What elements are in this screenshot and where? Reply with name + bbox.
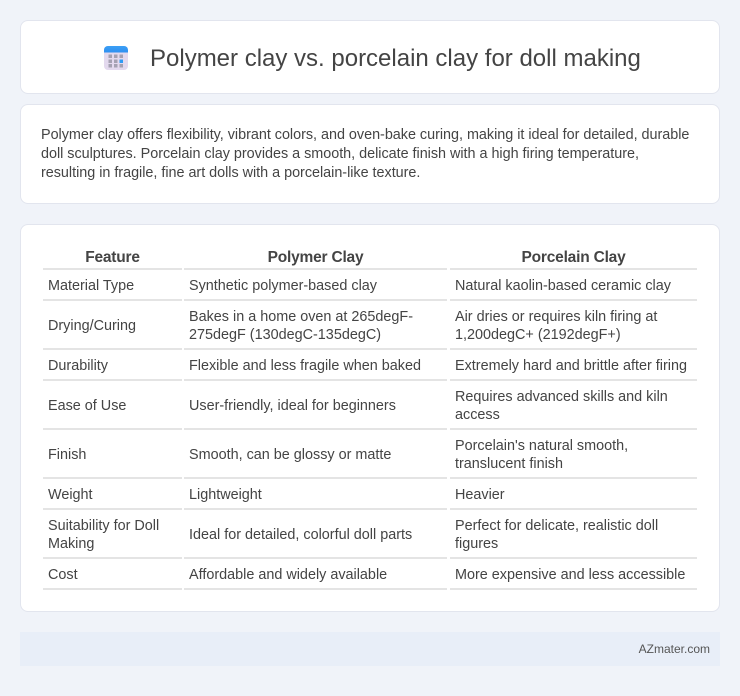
comparison table: Heavier	[455, 487, 505, 503]
comparison table: Natural kaolin-based ceramic clay	[455, 278, 671, 294]
intro text: doll sculptures. Porcelain clay provides a smooth, delicate finish with a high firing temperature,	[41, 146, 639, 162]
comparison table: Suitability for Doll	[48, 518, 159, 534]
comparison table: Making	[48, 536, 94, 552]
comparison table: Flexible and less fragile when baked	[189, 358, 421, 374]
comparison table: Air dries or requires kiln firing at	[455, 309, 657, 325]
comparison table: Synthetic polymer-based clay	[189, 278, 377, 294]
title card	[20, 20, 720, 94]
comparison table: Porcelain Clay	[521, 249, 626, 266]
comparison table: Material Type	[48, 278, 134, 294]
comparison table: access	[455, 407, 500, 423]
comparison table: Finish	[48, 447, 86, 463]
comparison table: 275degF (130degC-135degC)	[189, 327, 381, 343]
comparison table: Ideal for detailed, colorful doll parts	[189, 527, 412, 543]
comparison table: Extremely hard and brittle after firing	[455, 358, 687, 374]
comparison table: Weight	[48, 487, 93, 503]
comparison table: Requires advanced skills and kiln	[455, 389, 668, 405]
comparison table: Cost	[48, 567, 78, 583]
comparison table: Affordable and widely available	[189, 567, 387, 583]
comparison table: Polymer Clay	[268, 249, 363, 266]
intro text panel	[20, 104, 720, 204]
comparison table: Bakes in a home oven at 265degF-	[189, 309, 413, 325]
comparison table: translucent finish	[455, 456, 563, 472]
intro text: resulting in fragile, fine art dolls with a porcelain-like texture.	[41, 165, 420, 181]
comparison table: figures	[455, 536, 498, 552]
comparison table: More expensive and less accessible	[455, 567, 685, 583]
footer bar	[20, 632, 720, 666]
intro text: Polymer clay offers flexibility, vibrant colors, and oven-bake curing, making it ideal for detailed, durable	[41, 127, 689, 143]
title: Polymer clay vs. porcelain clay for doll making	[150, 45, 641, 72]
intro text	[41, 127, 689, 181]
footer source text: AZmater.com	[639, 642, 710, 656]
comparison table: Durability	[48, 358, 108, 374]
comparison table: Drying/Curing	[48, 318, 136, 334]
icon: calendar	[104, 46, 128, 70]
comparison table panel	[20, 224, 720, 612]
comparison table: Smooth, can be glossy or matte	[189, 447, 391, 463]
comparison table: Ease of Use	[48, 398, 126, 414]
comparison table: Perfect for delicate, realistic doll	[455, 518, 658, 534]
comparison table: Lightweight	[189, 487, 262, 503]
comparison table: 1,200degC+ (2192degF+)	[455, 327, 621, 343]
comparison table: Porcelain's natural smooth,	[455, 438, 628, 454]
comparison table: User-friendly, ideal for beginners	[189, 398, 396, 414]
comparison table: Feature	[85, 249, 140, 266]
